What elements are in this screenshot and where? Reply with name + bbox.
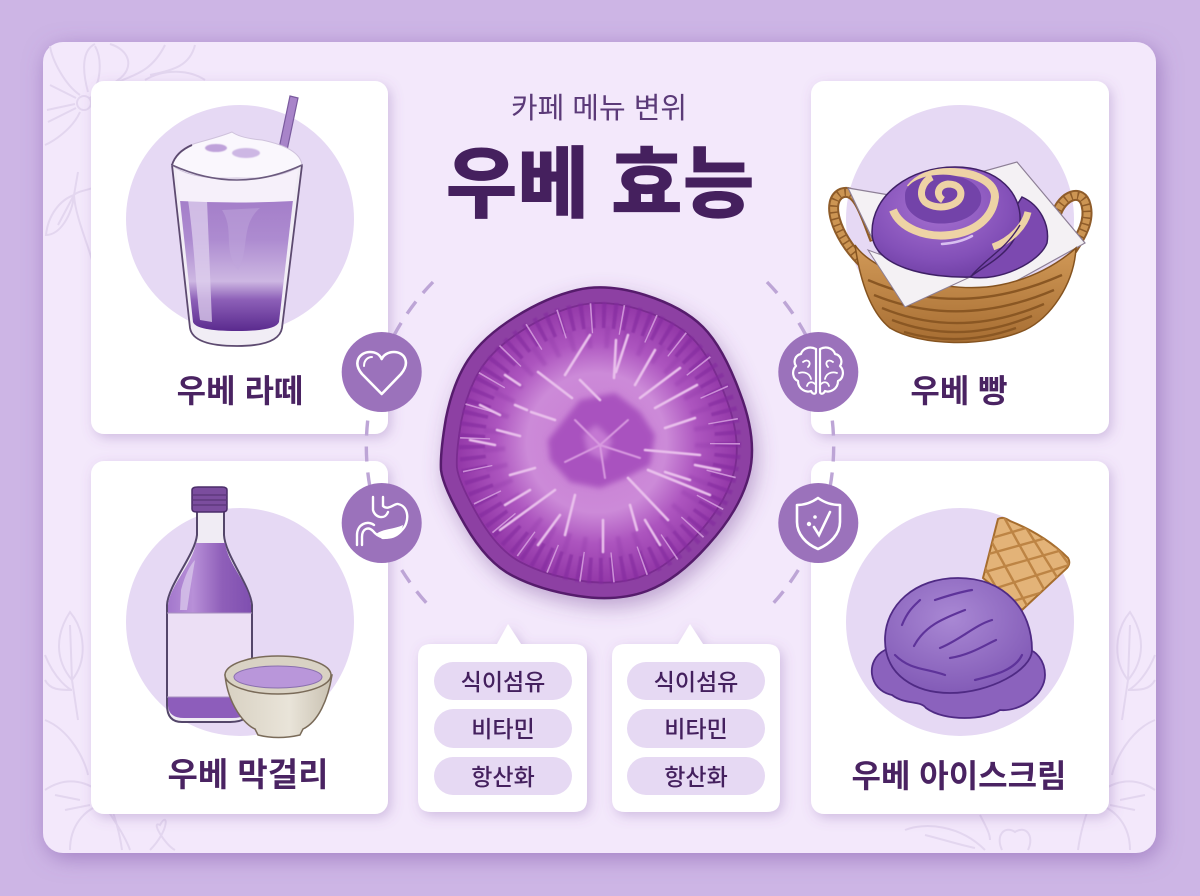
- pill: 비타민: [434, 709, 572, 748]
- icon: heart: [342, 332, 422, 412]
- pill: 항산화: [434, 757, 572, 795]
- central ube slice: [441, 287, 752, 598]
- card: 우베 막걸리: [91, 461, 388, 814]
- pill: 항산화: 항산화: [664, 764, 728, 790]
- illustration: makgeolli bottle and bowl: [167, 487, 332, 738]
- label: 우베 아이스크림: 우베 아이스크림: [852, 758, 1066, 794]
- label: 우베 막걸리: 우베 막걸리: [168, 756, 328, 793]
- pill: 비타민: 비타민: [664, 716, 728, 742]
- card: 우베 빵: [811, 81, 1109, 434]
- pill: 식이섬유: [434, 662, 572, 700]
- illustration: ube bun in basket: [834, 162, 1087, 343]
- pill: 비타민: [627, 709, 765, 748]
- pill: 비타민: 비타민: [471, 716, 535, 742]
- dashed arc connecting left icons: [366, 282, 433, 610]
- pill: 항산화: [627, 757, 765, 795]
- pill: 식이섬유: 식이섬유: [461, 669, 545, 695]
- slice rays: [470, 335, 720, 552]
- slice core highlights: [565, 420, 640, 478]
- icon: brain: [778, 332, 858, 412]
- makgeolli backdrop circle: [126, 508, 354, 736]
- pill: 식이섬유: 식이섬유: [654, 669, 738, 695]
- illustration: ube ice cream with waffle: [870, 516, 1070, 719]
- label: 우베 라떼: 우베 라떼: [177, 373, 303, 409]
- label: 우베 빵: 우베 빵: [910, 373, 1008, 409]
- card: 우베 라떼: [91, 81, 388, 434]
- ice cream backdrop circle: [846, 508, 1074, 736]
- dashed arc connecting right icons: [767, 282, 834, 610]
- subtitle: 카페 메뉴 변위: [511, 92, 687, 125]
- bread backdrop circle: [846, 105, 1074, 333]
- callout: left nutrients: [418, 624, 587, 812]
- pill: 항산화: 항산화: [471, 764, 535, 790]
- slice core: [548, 393, 655, 488]
- pill: 식이섬유: [627, 662, 765, 700]
- illustration: ube latte glass: [172, 96, 302, 346]
- card: 우베 아이스크림: [811, 461, 1109, 814]
- title: 우베 효능: [446, 140, 754, 228]
- icon: stomach: [342, 483, 422, 563]
- icon: shield: [778, 483, 858, 563]
- callout: right nutrients: [612, 624, 780, 812]
- latte backdrop circle: [126, 105, 354, 333]
